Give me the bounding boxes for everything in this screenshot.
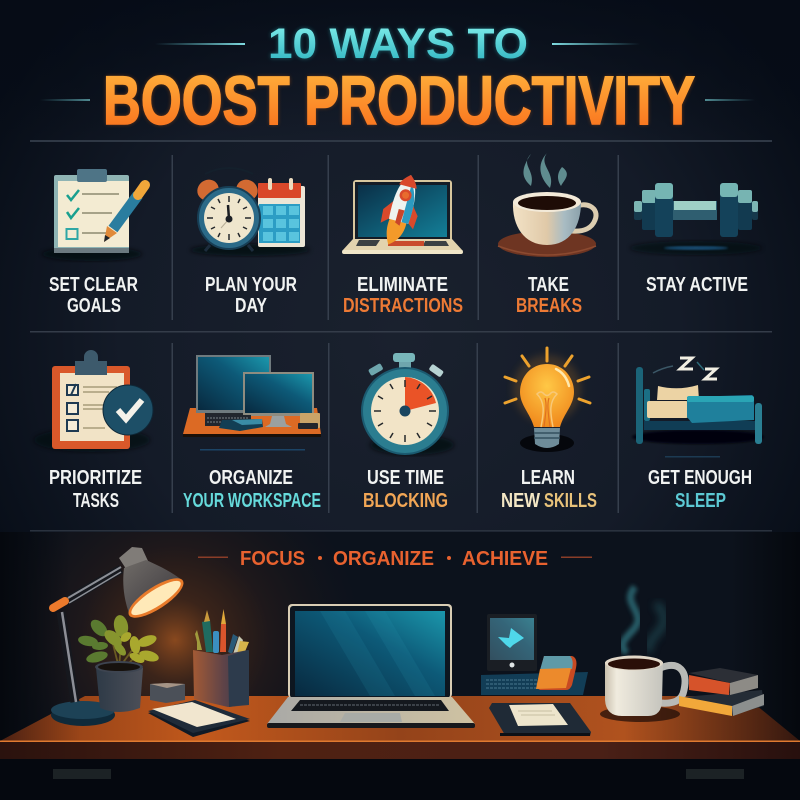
label: ELIMINATE [357, 274, 448, 296]
desk [0, 696, 800, 800]
label: NEW [501, 490, 540, 512]
panel: set clear goals [42, 169, 145, 317]
panel: eliminate distractions [342, 170, 463, 317]
label [501, 467, 597, 512]
title [40, 20, 755, 139]
label: PRIORITIZE [49, 467, 142, 489]
label [49, 467, 142, 512]
label: STAY ACTIVE [646, 274, 748, 296]
pen holder [193, 609, 249, 707]
label [49, 274, 138, 317]
icon: laptop with rocket [342, 170, 463, 254]
label [183, 467, 321, 512]
icon: clock and calendar [190, 168, 310, 256]
panel: desk scene [0, 532, 800, 800]
label: TAKE [528, 274, 569, 296]
laptop [267, 604, 475, 728]
label: TASKS [73, 490, 119, 512]
lamp [51, 547, 189, 726]
label: SKILLS [544, 490, 597, 512]
label [363, 467, 448, 512]
panel: prioritize tasks [34, 350, 153, 512]
tagline: ORGANIZE [333, 548, 434, 570]
icon: coffee cup [498, 153, 596, 257]
tagline: FOCUS [240, 548, 305, 570]
coffee mug [600, 587, 685, 722]
label: GOALS [67, 295, 121, 317]
label: BREAKS [516, 295, 582, 317]
label: PLAN YOUR [205, 274, 297, 296]
tablet and keyboard [481, 614, 588, 695]
small block [150, 683, 185, 703]
label [205, 274, 297, 317]
panel: plan your day [190, 168, 310, 317]
label: DAY [235, 295, 268, 317]
label [343, 274, 463, 317]
notebook [148, 700, 250, 737]
stack of books [679, 668, 764, 716]
icon: stopwatch [362, 353, 454, 455]
tablet on desk [489, 703, 591, 736]
title: 10 WAYS TO [268, 20, 528, 68]
tagline: ACHIEVE [462, 548, 548, 570]
label: ORGANIZE [209, 467, 293, 489]
label: YOUR WORKSPACE [183, 490, 321, 512]
icon: dumbbell [630, 183, 762, 255]
label: DISTRACTIONS [343, 295, 463, 317]
panel: learn new skills [501, 348, 597, 512]
label: SLEEP [675, 490, 726, 512]
label: GET ENOUGH [648, 467, 752, 489]
label: SET CLEAR [49, 274, 138, 296]
label: LEARN [521, 467, 575, 489]
icon: bed with z's [632, 358, 764, 458]
icon: checklist with pencil [42, 169, 145, 261]
panel: stay active [630, 183, 762, 296]
label [648, 467, 752, 512]
icon: clipboard with check badge [34, 350, 153, 452]
label: BLOCKING [363, 490, 448, 512]
icon: light bulb [505, 348, 590, 452]
panel: get enough sleep [632, 358, 764, 512]
label [516, 274, 582, 317]
panel: take breaks [498, 153, 596, 317]
icon: dual monitors on desk [183, 355, 321, 450]
panel: organize your workspace [183, 355, 321, 512]
title: 10 WAYS TO [268, 20, 528, 68]
plant [77, 614, 160, 712]
tagline [198, 548, 592, 570]
panel: use time blocking [362, 353, 454, 512]
label: USE TIME [367, 467, 444, 489]
